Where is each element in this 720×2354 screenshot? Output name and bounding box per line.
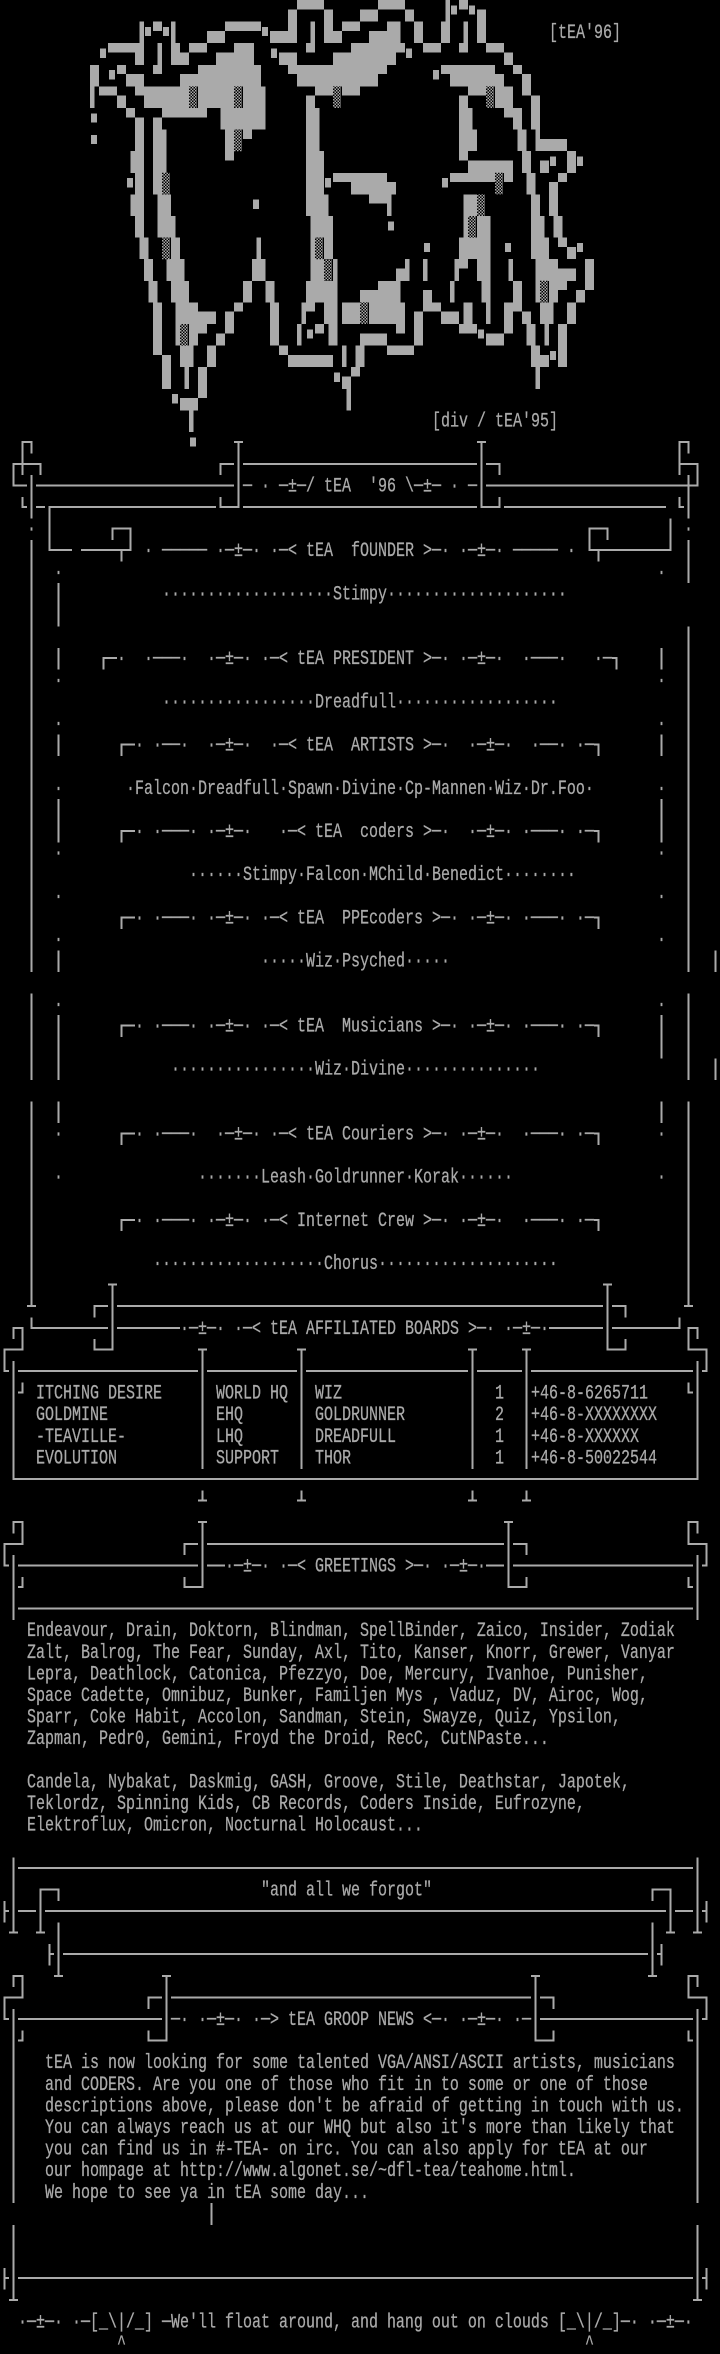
heading: GREETINGS xyxy=(4,1522,706,1620)
text block: greetings groups: Candela, Nybakat, Daskmig, GASH, Groove, Stile, Deathstar, Japotek, xyxy=(27,1771,630,1794)
heading: tEA AFFILIATED BOARDS: ·─±─· ·─< tEA AFFILIATED BOARDS >─· ·─±─· xyxy=(180,1318,549,1341)
heading: tEA coders: · ·───· ·─±─· ·─< tEA coders >─· ·─±─· ·───· ·─ xyxy=(135,821,594,844)
text block: group news: our hompage at http://www.algonet.se/~dfl-tea/teahome.html. xyxy=(45,2160,576,2183)
table row: Teaville: LHQ xyxy=(216,1426,243,1449)
heading: Internet Crew: · ·───· ·─±─· ·─< Internet Crew >─· ·─±─· ·───· ·─ xyxy=(135,1210,594,1233)
text block: greetings groups: Teklordz, Spinning Kids, CB Records, Coders Inside, Eufrozyne, xyxy=(27,1793,585,1816)
name row: coders: ······Stimpy·Falcon·MChild·Benedict········ xyxy=(189,864,576,887)
table row: Goldmine: EHQ xyxy=(216,1404,243,1427)
text block: group news: and CODERS. Are you one of those who fit in to some or one of those xyxy=(45,2074,648,2097)
table row: Evolution: THOR xyxy=(315,1447,351,1470)
table row: Itching Desire: ITCHING DESIRE xyxy=(36,1383,162,1405)
footer line: float around xyxy=(18,2311,693,2354)
table row: Goldmine: GOLDMINE xyxy=(36,1404,108,1427)
name row: musicians: ················Wiz·Divine··············· xyxy=(171,1059,540,1081)
table: affiliated boards xyxy=(4,1328,706,1501)
heading: tEA PPEcoders: · ·───· ·─±─· ·─< tEA PPEcoders >─· ·─±─· ·───· ·─ xyxy=(135,907,594,930)
rail dots: · xyxy=(27,519,36,541)
rail dots: · xyxy=(54,713,63,736)
table row: Evolution: 1 xyxy=(495,1447,504,1470)
name row: Stimpy: ···················Stimpy···················· xyxy=(162,583,567,606)
name row: PPEcoders: ·····Wiz·Psyched····· xyxy=(261,951,450,973)
rail dots: · xyxy=(54,886,63,909)
long side rails frame xyxy=(27,540,716,1306)
text block: greetings groups xyxy=(27,1771,630,1837)
table row: Goldmine: 2 xyxy=(495,1404,504,1427)
heading: tEA GROOP NEWS: ─· ·─±─· ·─> tEA GROOP NEWS <─· ·─±─· ·─ xyxy=(170,2009,531,2032)
text block: group news: We hope to see ya in tEA some day... xyxy=(45,2182,369,2205)
heading: tEA '96: ─ · ─±─/ tEA '96 \─±─ · ─ xyxy=(242,475,477,498)
text block: greetings groups: Elektroflux, Omicron, Nocturnal Holocaust... xyxy=(27,1815,423,1837)
table row: Teaville: -TEAVILLE- xyxy=(36,1426,126,1449)
heading: tEA fOUNDER xyxy=(81,518,670,563)
rail dots: · xyxy=(54,670,63,693)
table row: Itching Desire: +46-8-6265711 xyxy=(531,1383,648,1405)
rail dots: · xyxy=(54,562,63,585)
rail dots: · xyxy=(54,1123,63,1146)
table row: Teaville: +46-8-XXXXXX xyxy=(531,1426,639,1449)
heading: tEA fOUNDER: · ───── ·─±─· ·─< tEA fOUNDER >─· ·─±─· ───── · xyxy=(144,540,576,563)
name row: artists: ·Falcon·Dreadfull·Spawn·Divine·Cp-Mannen·Wiz·Dr.Foo· xyxy=(126,778,594,801)
rail dots: · xyxy=(657,1123,666,1146)
text block: greetings people xyxy=(27,1620,675,1751)
rail dots: · xyxy=(54,994,63,1017)
text block: greetings people: Zapman, Pedr0, Gemini, Froyd the Droid, RecC, CutNPaste... xyxy=(27,1728,549,1751)
table row: Evolution xyxy=(36,1447,657,1470)
text block: group news: You can always reach us at our WHQ but also it's more than likely that xyxy=(45,2117,675,2140)
rail dots: · xyxy=(657,713,666,736)
rail dots: · xyxy=(54,778,63,801)
table row: Goldmine: GOLDRUNNER xyxy=(315,1404,405,1427)
heading: tEA Couriers: · ·───· ·─±─· ·─< tEA Couriers >─· ·─±─· ·───· ·─ xyxy=(135,1123,594,1146)
heading: tEA ARTISTS: · ·──· ·─±─· ·─< tEA ARTISTS >─· ·─±─· ·──· ·─ xyxy=(135,735,594,757)
table row: Goldmine xyxy=(36,1404,657,1427)
table row: Evolution: EVOLUTION xyxy=(36,1447,117,1470)
rail dots: · xyxy=(657,670,666,693)
table row: Itching Desire: 1 xyxy=(495,1383,504,1405)
rail dots: · xyxy=(657,929,666,952)
table row: Itching Desire: WIZ xyxy=(315,1383,342,1405)
heading: GREETINGS: ·─±─· ·─< GREETINGS >─· ·─±─· xyxy=(225,1555,486,1578)
rail dots: · xyxy=(657,843,666,865)
tag: tEA'96: [tEA'96] xyxy=(549,22,621,45)
tag: div / tEA'95: [div / tEA'95] xyxy=(432,411,558,433)
text block: group news xyxy=(45,2052,684,2205)
heading: tEA AFFILIATED BOARDS xyxy=(32,1285,680,1349)
heading: tEA '96 xyxy=(14,442,698,550)
table frame xyxy=(4,1328,706,1501)
table row: Evolution: SUPPORT xyxy=(216,1447,279,1470)
heading: tEA GROOP NEWS xyxy=(4,1976,706,2203)
text block: greetings people: Lepra, Deathlock, Catonica, Pfezzyo, Doe, Mercury, Ivanhoe, Punisher, xyxy=(27,1663,648,1686)
table row: Goldmine: +46-8-XXXXXXXX xyxy=(531,1404,657,1427)
footer line: float around: ·─±─· ·─[_\|/_] ─We'll float around, and hang out on clouds [_\|/_]─· ·─±─· xyxy=(18,2311,693,2334)
name row: Dreadfull: ·················Dreadfull·················· xyxy=(162,691,558,714)
name row: Chorus: ···················Chorus···················· xyxy=(153,1253,558,1276)
table row: Teaville: 1 xyxy=(495,1426,504,1449)
heading: tEA Musicians: · ·───· ·─±─· ·─< tEA Musicians >─· ·─±─· ·───· ·─ xyxy=(135,1015,594,1038)
rail dots: · xyxy=(657,886,666,909)
text block: greetings people: Sparr, Coke Habit, Accolon, Sandman, Stein, Swayze, Quiz, Ypsilon, xyxy=(27,1707,621,1729)
table row: Itching Desire: WORLD HQ xyxy=(216,1383,288,1405)
rail dots: · xyxy=(684,519,693,541)
text block: group news: you can find us in #-TEA- on irc. You can also apply for tEA at our xyxy=(45,2139,648,2161)
closing frame xyxy=(4,2203,706,2300)
text block: greetings people: Zalt, Balrog, The Fear, Sunday, Axl, Tito, Kanser, Knorr, Grewer, Vanyar xyxy=(27,1642,675,1665)
logo: tEA block art xyxy=(90,0,594,442)
banner: and all we forgot xyxy=(4,1858,706,1976)
name row: couriers: ·······Leash·Goldrunner·Korak······ xyxy=(198,1167,513,1189)
rail dots: · xyxy=(657,994,666,1017)
table row: Teaville xyxy=(36,1426,639,1449)
heading: tEA PRESIDENT: · ·───· ·─±─· ·─< tEA PRESIDENT >─· ·─±─· ·───· ·─ xyxy=(117,648,612,671)
table row: Teaville: DREADFULL xyxy=(315,1426,396,1449)
table row: Evolution: +46-8-50022544 xyxy=(531,1447,657,1470)
rail dots xyxy=(27,519,693,1189)
rail dots: · xyxy=(657,1167,666,1189)
text block: group news: tEA is now looking for some talented VGA/ANSI/ASCII artists, musicians xyxy=(45,2052,675,2075)
table row: Itching Desire xyxy=(36,1383,648,1405)
rail dots: · xyxy=(657,778,666,801)
rail dots: · xyxy=(657,562,666,585)
text block: group news: descriptions above, please don't be afraid of getting in touch with us. xyxy=(45,2095,684,2118)
text block: greetings people: Space Cadette, Omnibuz, Bunker, Familjen Mys , Vaduz, DV, Airoc, Wog, xyxy=(27,1685,648,1708)
banner: and all we forgot: "and all we forgot" xyxy=(261,1879,432,1902)
rail dots: · xyxy=(54,929,63,952)
rail dots: · xyxy=(54,1167,63,1189)
text block: greetings people: Endeavour, Drain, Doktorn, Blindman, SpellBinder, Zaico, Insider, Zodiak xyxy=(27,1620,675,1643)
rail dots: · xyxy=(54,843,63,865)
